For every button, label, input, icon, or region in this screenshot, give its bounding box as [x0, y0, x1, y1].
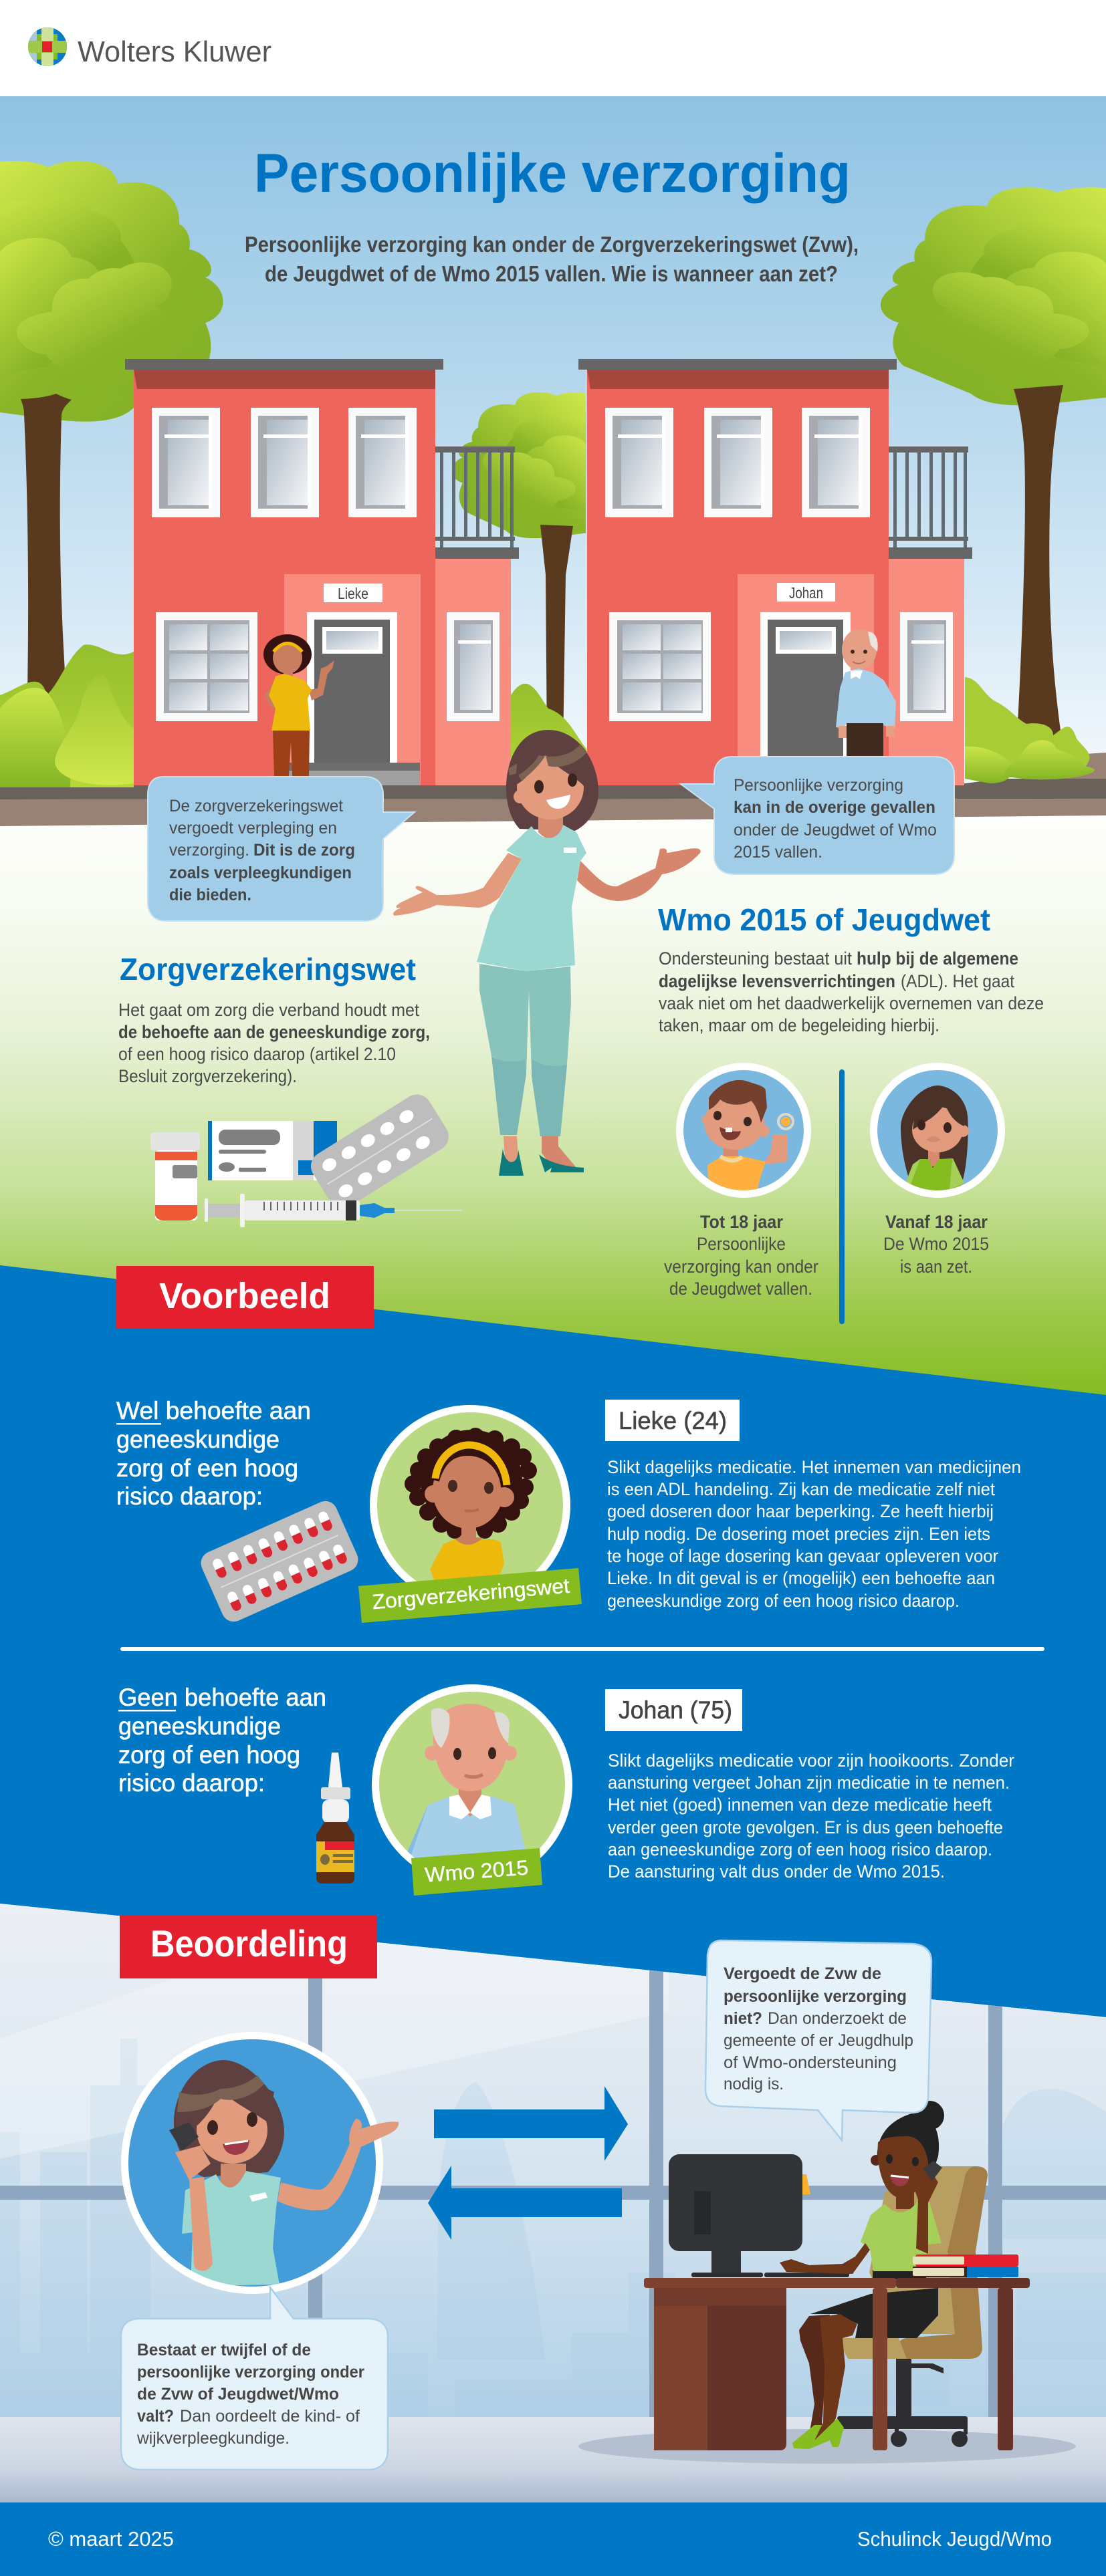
callout: Wmo/Jeugdwet bubble: [681, 757, 954, 874]
neck: [538, 815, 563, 839]
text block: Wmo 2015 of Jeugdwet: vaak niet om het daadwerkelijk overnemen van deze: [659, 993, 1044, 1013]
callout: twijfel: de Zvw of Jeugdwet/Wmo: [137, 2385, 339, 2404]
subtitle: Persoonlijke verzorging kan onder de Zorgverzekeringswet (Zvw),: [245, 232, 859, 257]
text: Geen behoefte: geneeskundige: [118, 1712, 281, 1740]
text: Vanaf 18 jaar: Vanaf 18 jaar: [885, 1212, 988, 1232]
callout: Zvw question: of Wmo-ondersteuning: [724, 2053, 897, 2072]
trousers: [479, 964, 571, 1074]
panel: office background: [0, 1898, 1106, 2420]
title: Persoonlijke verzorging: [254, 143, 851, 204]
callout: Zorgverzekeringswet bubble: Dit is de zorg: [253, 841, 355, 860]
subtitle: de Jeugdwet of de Wmo 2015 vallen. Wie is wanneer aan zet?: [265, 261, 838, 286]
illustration: woman on the phone: [780, 2101, 944, 2449]
light streaks: [0, 1918, 669, 2159]
heading: Voorbeeld: [116, 1266, 374, 1329]
name plate: Johan: [777, 583, 835, 602]
face: [514, 790, 527, 803]
house: Lieke: [125, 359, 519, 785]
figure: nurse presenting: [393, 730, 701, 1176]
callout: Zvw question: [705, 1940, 931, 2140]
header bar: [0, 0, 1106, 96]
text: Geen behoefte: zorg of een hoog: [118, 1741, 300, 1769]
heading: Voorbeeld: Voorbeeld: [159, 1276, 330, 1316]
syringe: [205, 1194, 462, 1227]
footer: [0, 2502, 1106, 2576]
text block: Wmo 2015 of Jeugdwet: dagelijkse levensverrichtingen: [659, 971, 895, 991]
portrait: boy under 18: [676, 1063, 811, 1198]
text block: Wmo 2015 of Jeugdwet: [659, 948, 1044, 1035]
tree: left: [0, 161, 223, 729]
text block: Johan: [608, 1751, 1014, 1882]
text: Geen behoefte: Geen behoefte aan: [118, 1684, 326, 1711]
skyline silhouettes: [0, 2039, 1106, 2286]
arrow: right: [434, 2086, 628, 2161]
legs: [799, 2315, 830, 2435]
text block: Lieke: is een ADL handeling. Zij kan de medicatie zelf niet: [607, 1479, 995, 1499]
text block: Wmo 2015 of Jeugdwet: Ondersteuning bestaat uit: [659, 948, 852, 969]
name tag: Lieke (24): Lieke (24): [619, 1407, 727, 1434]
waving arm: [278, 2119, 399, 2210]
arms: [393, 853, 522, 916]
text block: Johan: Slikt dagelijks medicatie voor zijn hooikoorts. Zonder: [608, 1751, 1014, 1771]
text: Wel behoefte: zorg of een hoog: [116, 1454, 298, 1482]
icon: medication box, bottle, blister, syringe: [150, 1089, 462, 1227]
name plate: Lieke: [324, 584, 382, 602]
illustration: office chair: [837, 2166, 988, 2447]
callout: Wmo/Jeugdwet bubble: 2015 vallen.: [734, 843, 822, 862]
icon: nasal spray: [316, 1753, 354, 1884]
text block: Lieke: hulp nodig. De dosering moet precies zijn. Een iets: [607, 1524, 990, 1544]
arm on keyboard: [780, 2243, 870, 2274]
callout: Zorgverzekeringswet bubble: De zorgverzekeringswet: [169, 797, 343, 815]
text block: Wmo 2015 of Jeugdwet: taken, maar om de begeleiding hierbij.: [659, 1015, 939, 1035]
text: Tot 18 jaar: [664, 1212, 818, 1299]
arrow: left: [428, 2166, 622, 2240]
portrait: Johan: [372, 1684, 572, 1885]
text block: Wmo 2015 of Jeugdwet: (ADL). Het gaat: [901, 971, 1014, 991]
footer date: © maart 2025: [48, 2527, 174, 2551]
callout: twijfel: Dan oordeelt de kind- of: [180, 2407, 360, 2426]
background: lawn gradient: [0, 782, 1106, 1400]
portrait: Lieke: [370, 1405, 570, 1583]
heading: Beoordeling: [120, 1915, 377, 1978]
text: Geen behoefte: [118, 1684, 326, 1797]
label: Zorgverzekeringswet: [358, 1568, 582, 1623]
heading: Zorgverzekeringswet: Zorgverzekeringswet: [120, 952, 416, 987]
text: Vanaf 18 jaar: [883, 1212, 989, 1277]
hair and head: [915, 2101, 944, 2130]
callout: twijfel: wijkverpleegkundige.: [136, 2429, 290, 2448]
text block: Zorgverzekeringswet: de behoefte aan de geneeskundige zorg,: [118, 1022, 430, 1042]
logo wordmark: Wolters Kluwer: [78, 35, 271, 68]
text: Geen behoefte: risico daarop:: [118, 1769, 265, 1797]
bushes: [0, 644, 1095, 787]
text block: Johan: aan geneeskundige zorg of een hoog risico daarop.: [608, 1839, 992, 1859]
text block: Johan: aansturing vergeet Johan zijn medicatie in te nemen.: [608, 1773, 1010, 1793]
callout: Zvw question: gemeente of er Jeugdhulp: [724, 2031, 913, 2050]
callout: Wmo/Jeugdwet bubble: kan in de overige gevallen: [734, 798, 935, 817]
hair: [506, 730, 598, 831]
callout: Zorgverzekeringswet bubble: verzorging.: [169, 841, 249, 860]
subtitle: [245, 232, 859, 286]
name tag: Johan (75): [605, 1689, 742, 1731]
callout: Zvw question: nodig is.: [724, 2075, 784, 2093]
text: Wel behoefte: Wel behoefte aan: [116, 1397, 311, 1424]
callout: twijfel: [121, 2287, 388, 2470]
name plate: Johan: Johan: [789, 584, 823, 602]
text block: Lieke: te hoge of lage dosering kan gevaar opleveren voor: [607, 1546, 998, 1566]
text block: Johan: verder geen grote gevolgen. Er is dus geen behoefte: [608, 1817, 1003, 1837]
text: Tot 18 jaar: Tot 18 jaar: [700, 1212, 783, 1232]
figure: Johan at door: [836, 629, 896, 757]
callout: Zvw question: Dan onderzoekt de: [768, 2009, 907, 2028]
text block: Lieke: Lieke. In dit geval is er (mogelijk) een behoefte aan: [607, 1568, 995, 1588]
callout: Zorgverzekeringswet bubble: [148, 777, 415, 921]
heading: Wmo 2015 of Jeugdwet: Wmo 2015 of Jeugdwet: [658, 902, 990, 937]
callout: Zvw question: niet?: [724, 2009, 762, 2028]
callout: Zvw question: persoonlijke verzorging: [724, 1987, 907, 2006]
text: Wel behoefte: [116, 1397, 311, 1510]
callout: twijfel: persoonlijke verzorging onder: [137, 2363, 364, 2381]
portrait: nurse on the phone: [121, 2032, 399, 2294]
text: Vanaf 18 jaar: De Wmo 2015: [883, 1234, 989, 1254]
text: Tot 18 jaar: Persoonlijke: [697, 1234, 786, 1254]
raised arm and phone: [913, 2160, 938, 2254]
name tag: Lieke (24): [605, 1400, 740, 1441]
text block: Lieke: Slikt dagelijks medicatie. Het innemen van medicijnen: [607, 1457, 1021, 1477]
callout: Zorgverzekeringswet bubble: zoals verpleegkundigen: [169, 864, 352, 882]
figure: Lieke at door: [263, 634, 334, 776]
text block: Johan: Het niet (goed) innemen van deze medicatie heeft: [608, 1795, 992, 1815]
logo: Wolters Kluwer: [28, 27, 271, 68]
name plate: Lieke: Lieke: [338, 585, 368, 602]
background: sky: [0, 96, 1106, 785]
text block: Johan: De aansturing valt dus onder de Wmo 2015.: [608, 1861, 945, 1882]
text block: Zorgverzekeringswet: [118, 1000, 430, 1086]
illustration: books: [913, 2255, 1018, 2277]
label: Zorgverzekeringswet: Zorgverzekeringswet: [371, 1574, 570, 1614]
text block: Zorgverzekeringswet: Het gaat om zorg die verband houdt met: [118, 1000, 419, 1020]
text block: Zorgverzekeringswet: Besluit zorgverzekering).: [118, 1066, 297, 1086]
text block: Lieke: geneeskundige zorg of een hoog risico daarop.: [607, 1591, 960, 1611]
text block: Wmo 2015 of Jeugdwet: hulp bij de algemene: [857, 948, 1018, 969]
text: Tot 18 jaar: verzorging kan onder: [664, 1257, 818, 1277]
ground: [0, 753, 1106, 826]
portrait: girl from 18: [870, 1063, 1005, 1198]
legs and shoes: [504, 1136, 518, 1166]
callout: twijfel: valt?: [137, 2407, 174, 2426]
text: Vanaf 18 jaar: is aan zet.: [900, 1257, 972, 1277]
tree: right: [881, 187, 1106, 749]
skirt waist: [873, 2270, 926, 2279]
text: Wel behoefte: risico daarop:: [116, 1483, 263, 1510]
footer source: Schulinck Jeugd/Wmo: [857, 2527, 1052, 2551]
illustration: floor shadow: [578, 2429, 1076, 2464]
text: Wel behoefte: geneeskundige: [116, 1426, 280, 1453]
text block: Zorgverzekeringswet: of een hoog risico daarop (artikel 2.10: [118, 1044, 396, 1064]
callout: Zorgverzekeringswet bubble: vergoedt verpleging en: [169, 819, 337, 838]
floor: [0, 2417, 1106, 2502]
callout: twijfel: Bestaat er twijfel of de: [137, 2341, 311, 2359]
uniform top: [477, 825, 586, 971]
divider: age groups: [839, 1069, 845, 1324]
pill bottle: [150, 1132, 200, 1220]
heading: Beoordeling: Beoordeling: [150, 1922, 348, 1964]
callout: Wmo/Jeugdwet bubble: onder de Jeugdwet of Wmo: [734, 821, 937, 840]
name tag: Johan (75): Johan (75): [619, 1696, 732, 1724]
text: Tot 18 jaar: de Jeugdwet vallen.: [669, 1279, 812, 1299]
label: Wmo 2015: [411, 1848, 542, 1896]
blister pack: [306, 1089, 454, 1214]
icon: capsule blister: [197, 1497, 362, 1626]
text block: Lieke: goed doseren door haar beperking. Ze heeft hierbij: [607, 1501, 994, 1521]
text block: Lieke: [607, 1457, 1021, 1611]
neck: [896, 2189, 914, 2209]
tree: middle: [452, 392, 586, 749]
callout: Zvw question: Vergoedt de Zvw de: [724, 1964, 881, 1983]
green top: [861, 2201, 942, 2271]
callout: Wmo/Jeugdwet bubble: Persoonlijke verzorging: [734, 776, 903, 795]
medicine box: [208, 1121, 337, 1180]
callout: Zorgverzekeringswet bubble: die bieden.: [169, 886, 251, 904]
icon: globe logo: [28, 27, 67, 66]
label: Wmo 2015: Wmo 2015: [424, 1855, 529, 1887]
illustration: desk back and monitor: [669, 2154, 849, 2277]
panel: blue example section: [0, 1265, 1106, 2017]
illustration: desk: [644, 2278, 1030, 2450]
house: Johan: [578, 359, 972, 785]
